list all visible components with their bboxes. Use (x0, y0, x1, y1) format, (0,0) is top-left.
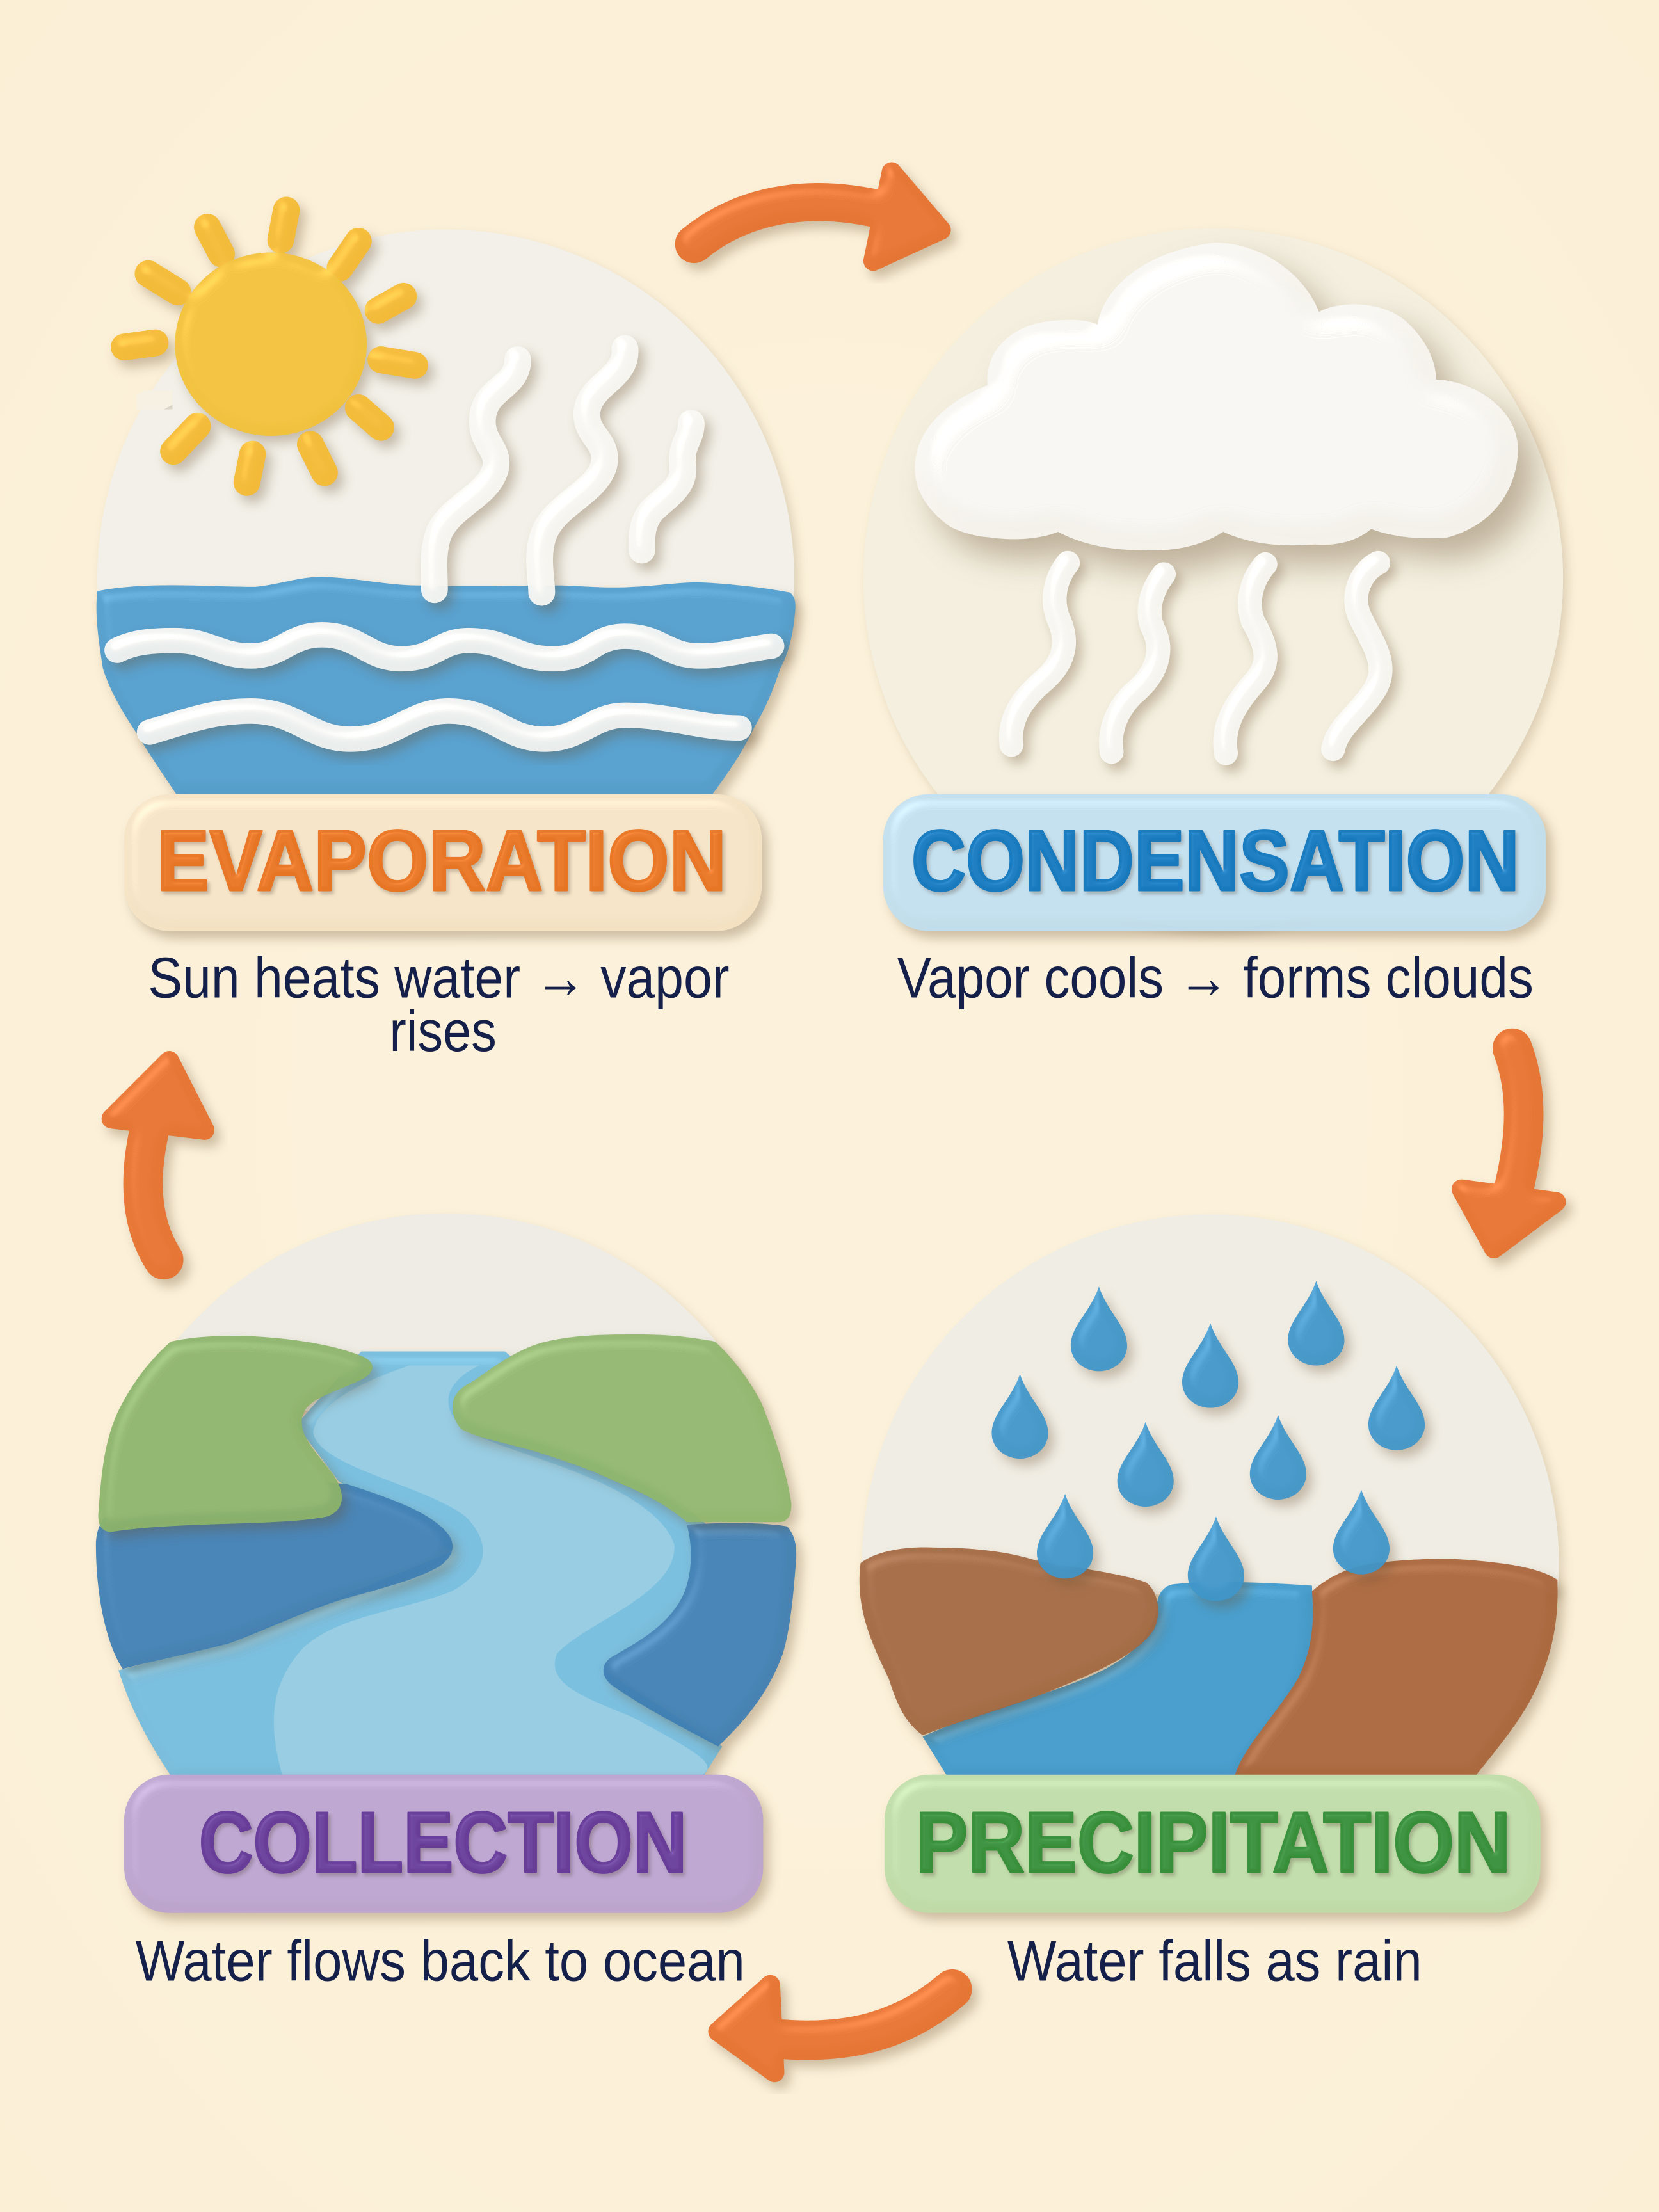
panel: collection (96, 1214, 796, 1994)
right green bank (453, 1334, 791, 1522)
label: precipitation: PRECIPITATION (915, 1795, 1511, 1891)
disc: precipitation sky (862, 1214, 1559, 1594)
label: precipitation (885, 1775, 1541, 1913)
label: collection: COLLECTION (199, 1795, 687, 1891)
label: condensation (883, 794, 1546, 931)
right brown bank (1235, 1559, 1558, 1777)
icon: rain drops (991, 1281, 1425, 1601)
arrow: collection to evaporation (111, 1061, 205, 1260)
panel: evaporation (97, 210, 796, 1064)
icon: condensing vapor (1011, 563, 1381, 753)
label: collection (124, 1775, 763, 1913)
text: collection description: Water flows back to ocean (136, 1929, 745, 1994)
left deep water (96, 1481, 453, 1669)
text: evaporation description (148, 945, 730, 1064)
text: condensation description: Vapor cools → forms clouds (897, 945, 1534, 1010)
icon: sun (124, 210, 415, 483)
river between banks (922, 1582, 1313, 1777)
left green bank (99, 1336, 373, 1532)
disc: condensation sky (863, 228, 1563, 928)
river inner stream (274, 1366, 707, 1775)
river (118, 1352, 722, 1777)
panel: condensation (863, 228, 1563, 1010)
label: condensation: CONDENSATION (911, 813, 1519, 909)
label: evaporation (124, 794, 762, 931)
arrow: evaporation to condensation (694, 172, 941, 261)
arrow: precipitation to collection (718, 1985, 952, 2072)
arrow: condensation to precipitation (1461, 1048, 1556, 1249)
text: evaporation description: rises (389, 999, 497, 1064)
label: evaporation: EVAPORATION (157, 813, 726, 909)
disc: collection sky (132, 1214, 760, 1411)
panel: precipitation (860, 1214, 1559, 1994)
water with waves (97, 577, 796, 794)
right deep water (604, 1523, 796, 1747)
icon: cloud (915, 243, 1518, 550)
text: evaporation description: Sun heats water → vapor (148, 945, 730, 1010)
left brown bank (860, 1548, 1158, 1735)
disc: evaporation sky (97, 230, 794, 635)
icon: pale sun ray (140, 392, 169, 408)
text: precipitation description: Water falls as rain (1007, 1929, 1422, 1994)
icon: rising vapor (434, 348, 691, 593)
